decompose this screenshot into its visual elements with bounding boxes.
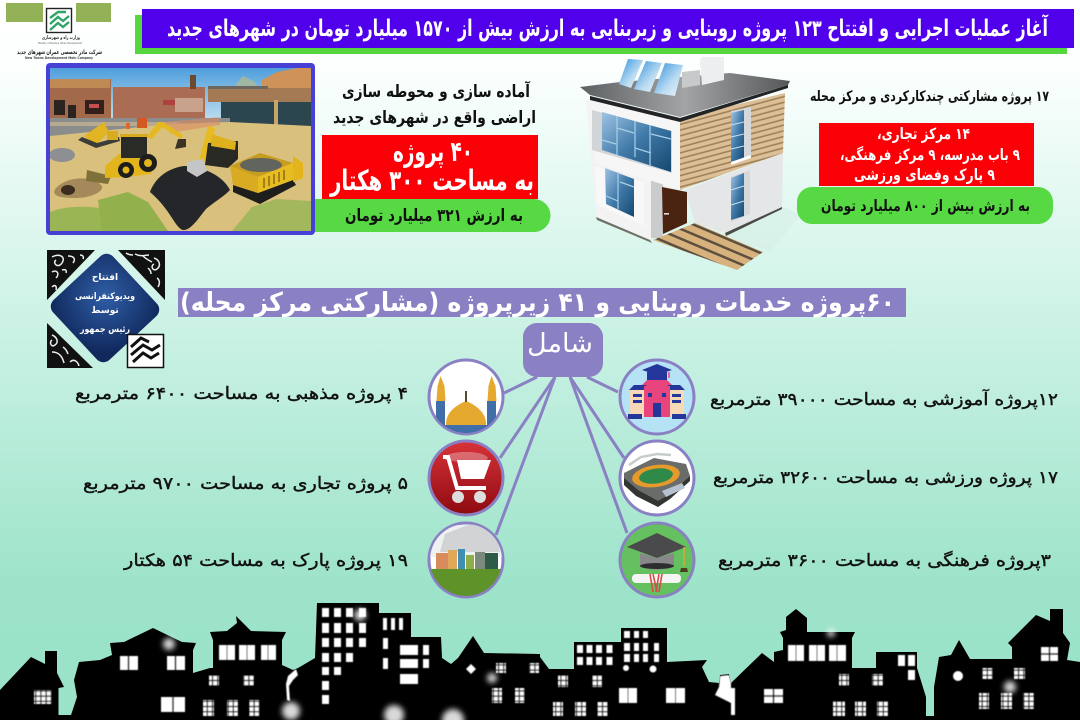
icon: school [620, 360, 694, 434]
callout: 40 projects: به مساحت ۳۰۰ هکتار [329, 164, 534, 197]
list item: cultural: ۳پروژه فرهنگی به مساحت ۳۶۰۰ مترمربع [718, 550, 1051, 571]
logo: ministry and new towns company: وزارت راه و شهرسازی [42, 35, 80, 41]
list item: park: ۱۹ پروژه پارک به مساحت ۵۴ هکتار [123, 551, 408, 571]
big dump truck [233, 180, 296, 204]
badge: video conference opening [47, 250, 165, 368]
callout: centers breakdown: ۱۴ مرکز تجاری، [877, 125, 970, 143]
excavator [199, 126, 215, 161]
icon: park and city [429, 523, 503, 597]
icon: mosque [429, 360, 503, 434]
backhoe [86, 170, 111, 184]
list item: educational: ۱۲پروژه آموزشی به مساحت ۳۹۰۰۰ مترمربع [710, 388, 1058, 410]
heading: 60 projects: ۶۰پروژه خدمات روبنایی و ۴۱ زیرپروژه (مشارکتی مرکز محله) [180, 288, 895, 318]
list item: commercial: ۵ پروژه تجاری به مساحت ۹۷۰۰ مترمربع [83, 474, 408, 494]
skyline silhouette [0, 603, 1080, 720]
callout: 40 projects: ۴۰ پروژه [393, 135, 473, 168]
text block: land preparation: اراضی واقع در شهرهای جدید [333, 108, 536, 128]
text block: land preparation: آماده سازی و محوطه سازی [342, 80, 531, 102]
list item: religious: ۴ پروژه مذهبی به مساحت ۶۴۰۰ مترمربع [75, 384, 408, 404]
callout: value 800 billion [797, 187, 1053, 224]
central node: includes: شامل [527, 329, 593, 359]
badge: video conference opening: توسط [91, 306, 119, 316]
central node: includes [523, 323, 603, 377]
logo: ministry and new towns company: Ministry of Roads & Urban Development [38, 41, 83, 45]
icon: shopping cart [429, 441, 503, 515]
callout: centers breakdown: ۹ پارک وفضای ورزشی [854, 166, 995, 185]
small dump truck [84, 122, 108, 143]
callout: centers breakdown: ۹ باب مدرسه، ۹ مرکز فرهنگی، [840, 145, 1020, 164]
text block: land preparation [333, 80, 536, 128]
illustration: modern house [580, 57, 801, 270]
callout: centers breakdown [819, 123, 1034, 186]
connector lines [496, 377, 627, 535]
badge: video conference opening: رئیس جمهور [79, 325, 130, 335]
logo: ministry and new towns company: شرکت مادر تخصصی عمران شهرهای جدید [17, 49, 102, 56]
callout: value 321 billion: به ارزش ۳۲۱ میلیارد تومان [345, 206, 523, 226]
badge: video conference opening: افتتاح [92, 273, 118, 283]
logo: ministry and new towns company [6, 3, 111, 60]
title banner [135, 9, 1074, 54]
list item: sports: ۱۷ پروژه ورزشی به مساحت ۳۲۶۰۰ مترمربع [713, 468, 1058, 488]
icon: stadium [620, 441, 694, 515]
badge: video conference opening: ویدیوکنفرانسی [75, 292, 135, 302]
logo: ministry and new towns company: New Towns Development Main Company [25, 56, 94, 60]
callout: 40 projects [322, 135, 538, 199]
panel: construction photo [46, 63, 315, 235]
icon: graduation cap [620, 523, 694, 597]
callout: value 800 billion: به ارزش بیش از ۸۰۰ میلیارد تومان [821, 197, 1030, 215]
callout: value 321 billion [315, 199, 550, 232]
